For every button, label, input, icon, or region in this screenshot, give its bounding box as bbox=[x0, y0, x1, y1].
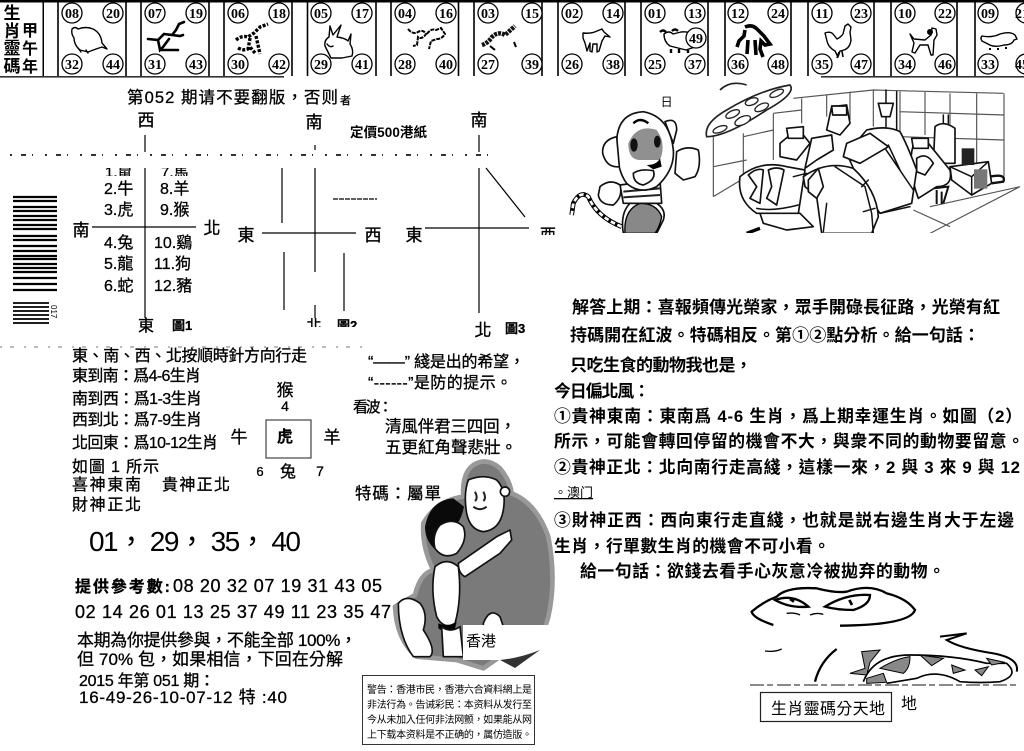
zodiac list: 1.鼠 bbox=[105, 164, 133, 181]
compass diagram 2 bbox=[238, 113, 382, 334]
equipment bbox=[878, 90, 1004, 204]
panel: ox: 07 bbox=[148, 7, 162, 22]
warning box: 上下载本资料是不正确的，属仿造版。 bbox=[367, 728, 532, 741]
brand box: 生肖靈碼分天地 bbox=[771, 700, 885, 718]
disclaimer and last result: 2015 年第 051 期： bbox=[79, 671, 215, 690]
panel: rabbit: 41 bbox=[355, 58, 369, 73]
faint band bbox=[0, 346, 370, 348]
panel: tiger bbox=[224, 0, 292, 76]
panel: ox: 19 bbox=[189, 7, 203, 22]
warning box: 警告：香港市民，香港六合資料網上是 bbox=[367, 683, 532, 696]
label patch: Hong Kong: 香港 bbox=[466, 633, 496, 650]
panel: tiger: 42 bbox=[272, 58, 286, 73]
zodiac list: 3.虎 bbox=[104, 201, 133, 219]
zodiac box diagram: 4 bbox=[281, 398, 289, 414]
compass diagram 3 bbox=[406, 111, 556, 340]
dashed ground line bbox=[750, 684, 1020, 686]
strip title: 年 bbox=[22, 57, 38, 76]
panel: rat: 08 bbox=[65, 7, 79, 22]
zodiac list: 6.蛇 bbox=[104, 277, 133, 295]
compass diagram 1: zodiac quadrants: 南 bbox=[72, 221, 90, 240]
zodiac box diagram: 虎 bbox=[277, 427, 293, 446]
zodiac list: 10.鷄 bbox=[154, 234, 192, 252]
panel: dog: 34 bbox=[898, 58, 912, 73]
disclaimer and last result: 本期為你提供參與，不能全部 100%， bbox=[77, 631, 357, 650]
compass diagram 1: zodiac quadrants: 東 bbox=[138, 317, 154, 335]
today's analysis: 生肖，行單數生肖的機會不可小看。 bbox=[554, 536, 830, 556]
illustration: operating room bbox=[706, 83, 1020, 233]
panel: rabbit: 05 bbox=[314, 7, 328, 22]
panel: pig: 33 bbox=[981, 58, 995, 73]
panel: monkey: 24 bbox=[771, 7, 785, 22]
panel: horse: 26 bbox=[565, 58, 579, 73]
strip title bbox=[4, 0, 44, 76]
feet bbox=[398, 598, 432, 657]
panel: snake: 39 bbox=[525, 58, 539, 73]
answer to last issue: 解答上期：喜報頻傳光榮家，眾手開碌長征路，光榮有紅 bbox=[572, 297, 1000, 317]
compass diagram 2: 東 bbox=[238, 226, 254, 245]
panel: monkey: 36 bbox=[731, 58, 745, 73]
panel: sheep: 37 bbox=[688, 58, 702, 73]
compass diagram 2: 西 bbox=[364, 226, 382, 245]
zodiac box diagram: 6 bbox=[256, 464, 264, 479]
panel: dragon: 16 bbox=[439, 7, 453, 22]
wave poem: 看波： bbox=[353, 399, 393, 416]
panel: sheep: 01 bbox=[648, 7, 662, 22]
line legend notes: “------”是防的提示。 bbox=[368, 374, 512, 392]
compass diagram 1: zodiac quadrants bbox=[72, 111, 220, 335]
issue heading: 者 bbox=[340, 94, 351, 107]
today's analysis: ②貴神正北：北向南行走高綫，這樣一來，2 與 3 來 9 與 12 bbox=[554, 457, 1020, 477]
panel: rooster bbox=[808, 0, 874, 76]
direction notes: 東到南：爲4-6生肖 bbox=[72, 367, 201, 385]
today's analysis: 給一句話：欲錢去看手心灰意冷被拋弃的動物。 bbox=[580, 561, 945, 581]
panel: dragon bbox=[391, 0, 458, 76]
illustration: lizard bbox=[752, 588, 1017, 683]
panel: dragon: 28 bbox=[398, 58, 412, 73]
strip title: 碼 bbox=[4, 57, 20, 76]
direction notes: 北回東：爲10-12生肖 bbox=[72, 434, 218, 452]
panel: horse: 38 bbox=[606, 58, 620, 73]
zodiac list: 12.豬 bbox=[154, 277, 192, 295]
girl bbox=[425, 498, 512, 631]
panel: ox: 31 bbox=[148, 58, 162, 73]
today's analysis bbox=[554, 381, 1024, 581]
panel: tiger: 18 bbox=[272, 7, 286, 22]
direction notes: 南到西：爲1-3生肖 bbox=[72, 390, 202, 408]
wave poem: 清風伴君三四回， bbox=[385, 417, 516, 436]
surgeons bbox=[740, 105, 951, 233]
zodiac list: 7.馬 bbox=[161, 164, 189, 181]
answer to last issue: 只吃生食的動物我也是， bbox=[570, 355, 752, 375]
recommended numbers: 01， 29， 35， 40 bbox=[89, 526, 301, 557]
gorilla face bbox=[465, 477, 504, 532]
panel: rooster: 47 bbox=[854, 58, 868, 73]
strip title: 肖 bbox=[4, 22, 20, 41]
compass diagram 3: 圖3 bbox=[505, 321, 525, 336]
panel: rabbit: 29 bbox=[314, 58, 328, 73]
warning box: 非法行為。告诫彩民：本资料从发行至 bbox=[367, 698, 532, 711]
line legend notes: “——” 綫是出的希望， bbox=[368, 353, 525, 371]
strip title: 生 bbox=[4, 4, 20, 23]
direction notes bbox=[72, 347, 307, 514]
panel: tiger: 06 bbox=[231, 7, 245, 22]
direction notes: 東、南、西、北按順時針方向行走 bbox=[72, 347, 307, 365]
illustration: cartoon tiger bbox=[572, 95, 699, 233]
zodiac box diagram: 牛 bbox=[230, 428, 248, 447]
illustration: gorilla hugging girl bbox=[395, 462, 552, 668]
panel: snake: 27 bbox=[481, 58, 495, 73]
zodiac box diagram: 羊 bbox=[324, 428, 340, 447]
stray character: 地 bbox=[901, 695, 917, 713]
tiled wall and floor bbox=[713, 90, 1020, 233]
barcode bbox=[13, 197, 58, 323]
today's analysis: 所示，可能會轉回停留的機會不大，與衆不同的動物要留意。 bbox=[554, 431, 1024, 451]
line legend notes bbox=[368, 353, 525, 392]
panel: monkey bbox=[725, 0, 791, 76]
panel: sheep: 25 bbox=[648, 58, 662, 73]
panel: sheep bbox=[641, 0, 708, 76]
zodiac box diagram: 猴 bbox=[276, 381, 294, 400]
panel: sheep: 13 bbox=[688, 7, 702, 22]
disclaimer and last result: 16-49-26-10-07-12 特 :40 bbox=[79, 688, 287, 707]
answer to last issue: 持碼開在紅波。特碼相反。第①②點分析。給一句話： bbox=[570, 325, 980, 345]
panel: rooster: 35 bbox=[815, 58, 829, 73]
direction notes: 財神正北 bbox=[72, 496, 141, 514]
zodiac box diagram: 兔 bbox=[280, 463, 296, 481]
special code note: 特碼：屬單 bbox=[355, 484, 441, 503]
zodiac list: 8.羊 bbox=[160, 180, 189, 198]
panel: rat: 32 bbox=[65, 58, 79, 73]
panel: dog: 22 bbox=[938, 7, 952, 22]
warning box: 今从未加入任何非法网颤，如果能从网 bbox=[367, 713, 532, 726]
zodiac list: 5.龍 bbox=[104, 255, 133, 273]
barcode: 017 bbox=[49, 305, 58, 319]
direction notes: 如圖 1 所示 bbox=[72, 458, 159, 476]
today's analysis: 。澳门 bbox=[554, 485, 593, 500]
today's analysis: ①貴神東南：東南爲 4-6 生肖，爲上期幸運生肖。如圖（2） bbox=[554, 407, 1022, 426]
price label: 定價500港紙 bbox=[350, 124, 428, 140]
compass diagram 1: zodiac quadrants: 圖1 bbox=[172, 318, 192, 333]
panel: snake: 15 bbox=[525, 7, 539, 22]
panel: monkey: 12 bbox=[731, 7, 745, 22]
panel: monkey: 48 bbox=[771, 58, 785, 73]
strip title: 靈 bbox=[4, 39, 20, 58]
disclaimer and last result: 但 70% 包，如果相信，下回在分解 bbox=[77, 650, 343, 669]
answer to last issue bbox=[570, 297, 1000, 375]
label patch: Hong Kong bbox=[463, 625, 555, 668]
panel: dragon: 40 bbox=[439, 58, 453, 73]
white mask below scene bbox=[560, 233, 1024, 273]
warning box bbox=[362, 676, 534, 744]
direction notes: 西到北：爲7-9生肖 bbox=[72, 411, 202, 429]
zodiac list: 4.兔 bbox=[104, 234, 133, 252]
panel: tiger: 30 bbox=[231, 58, 245, 73]
dotted scan band bbox=[10, 154, 490, 156]
panel: horse: 14 bbox=[606, 7, 620, 22]
reference numbers bbox=[75, 576, 391, 622]
wave poem bbox=[353, 399, 517, 457]
compass diagram 2: 北 bbox=[306, 317, 322, 334]
panel: horse: 02 bbox=[565, 7, 579, 22]
panel: rabbit bbox=[308, 0, 376, 76]
compass diagram 1: zodiac quadrants: 北 bbox=[204, 219, 220, 238]
zodiac list bbox=[104, 164, 192, 295]
compass diagram 2: 南 bbox=[306, 113, 322, 132]
compass diagram 3: 南 bbox=[470, 111, 488, 130]
today's analysis: 今日偏北風： bbox=[554, 381, 650, 401]
panel: horse bbox=[558, 0, 625, 76]
reference numbers: 08 20 32 07 19 31 43 05 bbox=[173, 576, 382, 596]
zodiac number strip bbox=[0, 0, 1024, 78]
direction notes: 貴神正北 bbox=[162, 476, 230, 494]
panel: dog: 46 bbox=[938, 58, 952, 73]
panel: dog bbox=[891, 0, 957, 76]
wave poem: 五更紅角聲悲壯。 bbox=[385, 438, 517, 457]
zodiac list: 9.猴 bbox=[160, 201, 189, 219]
zodiac list: 11.狗 bbox=[154, 255, 191, 273]
panel: sheep: 49 bbox=[689, 32, 703, 47]
panel: dragon: 04 bbox=[398, 7, 412, 22]
panel: ox bbox=[141, 0, 209, 76]
issue heading: 第052 期请不要翻版，否则 bbox=[127, 88, 338, 107]
panel: snake bbox=[474, 0, 542, 76]
illustration: cartoon tiger: 日 bbox=[661, 95, 673, 109]
panel: rat: 44 bbox=[106, 58, 120, 73]
compass diagram 3: 西 bbox=[540, 227, 556, 244]
reference numbers: 提供參考數: bbox=[75, 577, 170, 596]
panel: pig: 09 bbox=[981, 7, 995, 22]
strip title: 甲 bbox=[22, 23, 38, 40]
compass diagram 2: 圖2 bbox=[337, 318, 357, 333]
panel: rabbit: 17 bbox=[355, 7, 369, 22]
panel: pig bbox=[975, 0, 1024, 76]
panel: ox: 43 bbox=[189, 58, 203, 73]
disclaimer and last result bbox=[77, 631, 357, 707]
panel: rooster: 23 bbox=[854, 7, 868, 22]
panel: dog: 10 bbox=[898, 7, 912, 22]
zodiac box diagram: 7 bbox=[316, 463, 324, 479]
operating lamp bbox=[706, 83, 791, 137]
zodiac box diagram bbox=[230, 381, 340, 481]
today's analysis: ③財神正西：西向東行走直綫，也就是説右邊生肖大于左邊 bbox=[554, 510, 1014, 530]
compass diagram 1: zodiac quadrants: 西 bbox=[138, 111, 154, 130]
panel: snake: 03 bbox=[481, 7, 495, 22]
direction notes: 喜神東南 bbox=[72, 476, 141, 494]
panel: rooster: 11 bbox=[815, 7, 829, 22]
strip title: 午 bbox=[22, 39, 38, 58]
reference numbers: 02 14 26 01 13 25 37 49 11 23 35 47 bbox=[75, 602, 391, 622]
panel: rat: 20 bbox=[106, 7, 120, 22]
zodiac list: 2.牛 bbox=[104, 180, 133, 198]
panel: rat bbox=[58, 0, 126, 76]
brand box bbox=[760, 692, 892, 722]
compass diagram 3: 東 bbox=[406, 226, 422, 245]
compass diagram 3: 北 bbox=[474, 321, 492, 340]
